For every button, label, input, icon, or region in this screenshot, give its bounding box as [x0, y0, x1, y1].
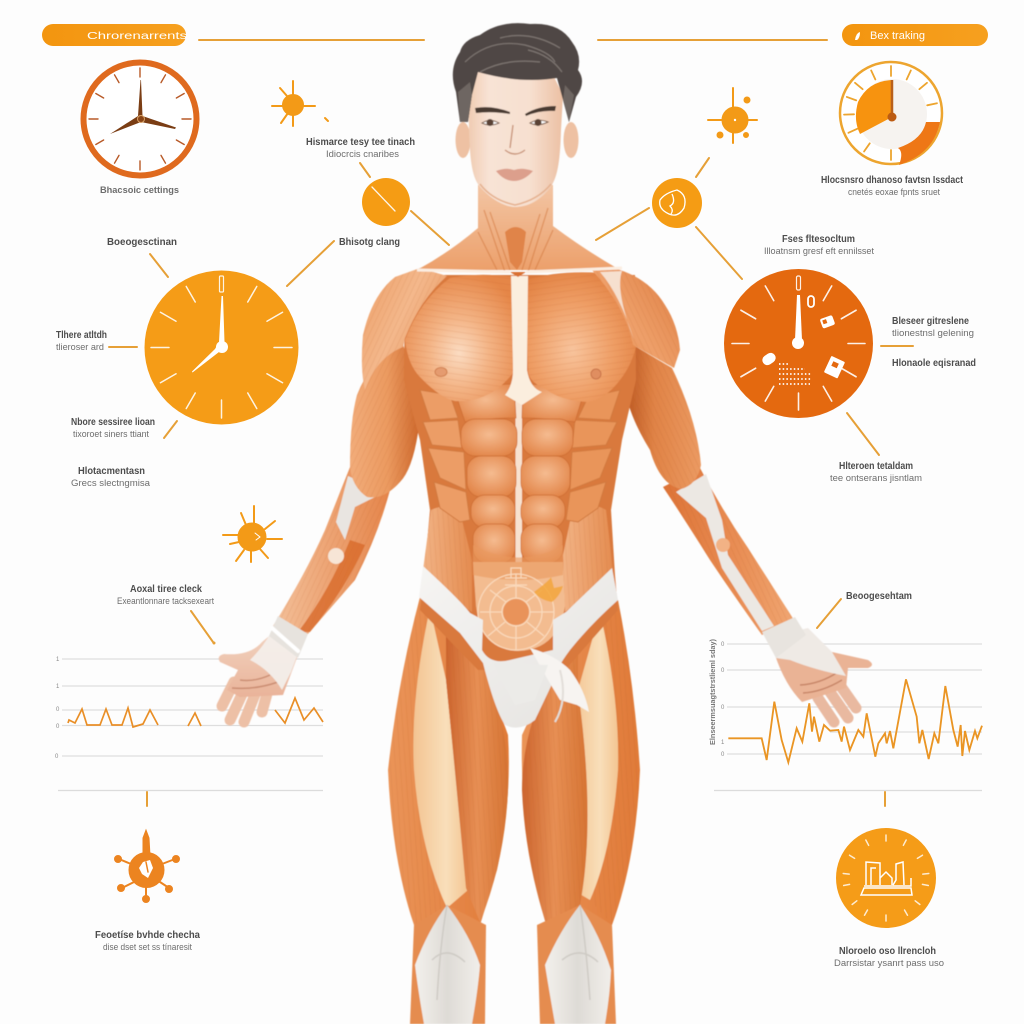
- arrow: dial to right labels: [881, 345, 913, 347]
- header: left pill: Chrorenarrents: [87, 30, 187, 42]
- label: beoogesehtam: Beoogesehtam: [846, 591, 912, 602]
- label: hlteroen tetaldam: Hlteroen tetaldam: [839, 461, 913, 472]
- head: [453, 23, 582, 207]
- chart: left line chart: 0: [55, 754, 59, 760]
- arrow: there atltdh to clock: [109, 346, 137, 348]
- eyes: [482, 119, 548, 126]
- icon: outlined wall clock: [84, 62, 196, 176]
- label: nbore sessiree: Nbore sessiree lioan: [71, 417, 155, 428]
- icon: orange badge left: [362, 178, 410, 226]
- label: there atltdh: Tlhere atltdh: [56, 330, 107, 341]
- linea alba: [516, 395, 522, 585]
- chart: right line chart: 0: [721, 668, 725, 674]
- chart: left line chart: 1: [56, 684, 60, 690]
- label: bleseer gitreslene: tlionestnsl gelening: [892, 328, 974, 339]
- chart: left line chart: [55, 657, 323, 760]
- icon: dark orange dial: [724, 269, 873, 418]
- icon: small sun left: [272, 81, 328, 126]
- rib serratus left: [420, 390, 470, 522]
- label: hlotacmentasn: Hlotacmentasn: [78, 466, 145, 477]
- caption: nloroelo: [834, 946, 944, 969]
- label: bleseer gitreslene: [892, 316, 974, 339]
- chart: right line chart: 0: [721, 642, 725, 648]
- divider: right lower: [714, 790, 982, 792]
- face: [468, 70, 563, 207]
- hair: [453, 23, 582, 122]
- label: hlotacmentasn: Grecs slectngmisa: [71, 478, 151, 489]
- label: hlteroen tetaldam: [830, 461, 922, 484]
- label: there atltdh: [56, 330, 107, 353]
- label: aoxal tiree cleck: [117, 584, 214, 607]
- label: boeogesctinan: Boeogesctinan: [107, 237, 177, 248]
- label: nbore sessiree: tixoroet siners ttiant: [73, 429, 149, 440]
- arrow: divider to icon right: [884, 792, 886, 806]
- arrow: aoxal to hand: [191, 611, 216, 644]
- label: upper centre left: Hismarce tesy tee tinach: [306, 137, 415, 148]
- torso base: [404, 275, 636, 670]
- caption: gauge: cnetés eoxae fpnts sruet: [848, 187, 940, 198]
- icon: small sun right: [708, 88, 757, 143]
- left deltoid: [362, 268, 447, 390]
- arrow: label to large clock: [287, 241, 334, 286]
- label: hlteroen tetaldam: tee ontserans jisntlam: [830, 473, 922, 484]
- right arm: [623, 345, 794, 635]
- right leg: [522, 600, 640, 1024]
- icon: large solid orange clock: [144, 270, 298, 424]
- chart: right line chart: Elnseermsuagtstrstlieml sday): [710, 639, 717, 745]
- nose: [505, 125, 525, 154]
- caption: gauge: Hlocsnsro dhanoso favtsn Issdact: [821, 175, 964, 186]
- caption: feoetise bvhde: Feoetíse bvhde checha: [95, 930, 200, 941]
- sternum: [505, 276, 542, 405]
- rib serratus right: [566, 390, 620, 522]
- arrow: dial to lower label: [847, 413, 879, 455]
- chart: right line chart: [710, 639, 982, 762]
- label: hlonaole eqisranad: Hlonaole eqisranad: [892, 358, 976, 369]
- divider: left lower: [58, 790, 323, 792]
- label: upper centre left: Idiocrcis cnaribes: [326, 149, 399, 160]
- side obliques: [423, 505, 613, 612]
- caption: feoetise bvhde: [95, 930, 200, 953]
- chart: right line chart: 0: [721, 752, 725, 758]
- caption: gauge: [821, 175, 964, 198]
- icon: pie gauge: [840, 62, 942, 165]
- caption: nloroelo: Darrsistar ysanrt pass uso: [834, 958, 944, 969]
- label: fses fltesocltum: [764, 234, 874, 257]
- arrow: divider to icon left: [146, 792, 148, 806]
- caption: clock settings: Bhacsoic cettings: [100, 185, 179, 196]
- icon: sun lower left: [223, 506, 282, 562]
- label: there atltdh: tlieroser ard: [56, 342, 104, 353]
- arrow: beoogesehtam to wrist: [817, 599, 841, 628]
- figure: anatomical male body: [219, 23, 872, 1024]
- arrow: nbore sessiree to clock: [164, 421, 177, 438]
- eyebrows: [475, 106, 556, 116]
- abdominal muscles: [455, 384, 584, 563]
- right deltoid: [590, 268, 680, 368]
- label: upper centre left: [306, 137, 415, 160]
- label: fses fltesocltum: Fses fltesocltum: [782, 234, 855, 245]
- caption: feoetise bvhde: dise dset set ss tínaresit: [103, 942, 192, 953]
- arrow: boeogesctinan to clock: [150, 254, 168, 277]
- chart: right line chart: 1: [721, 740, 725, 746]
- label: bhisotg clang: Bhisotg clang: [339, 237, 400, 248]
- label: bleseer gitreslene: Bleseer gitreslene: [892, 316, 969, 327]
- icon: orange badge right: [652, 178, 702, 228]
- neck and trapezius: [417, 185, 622, 277]
- arrow: badge to dial: [696, 227, 742, 279]
- chart: left line chart: 1: [56, 657, 60, 663]
- label: fses fltesocltum: Illoatnsm gresf eft ennilsset: [764, 246, 874, 257]
- arrow: badge to neck right: [596, 208, 649, 240]
- lips: [496, 169, 533, 181]
- header: right pill: Bex traking: [870, 30, 925, 42]
- abdominal organ overlay: [473, 545, 565, 651]
- ears: [456, 122, 578, 158]
- chart: left line chart: 0: [56, 707, 60, 713]
- right hand: [762, 617, 872, 722]
- header: left pill: [42, 24, 187, 46]
- left hand: [219, 616, 308, 722]
- hair highlights: [465, 36, 562, 72]
- left pectoral: [405, 275, 513, 401]
- caption: nloroelo: Nloroelo oso llrencloh: [839, 946, 936, 957]
- icon: orange badge with bars: [836, 828, 936, 928]
- header: right rule: [598, 39, 827, 41]
- hair sides fade: [458, 82, 574, 122]
- white undergarment: [419, 566, 618, 728]
- header: left rule: [199, 39, 424, 41]
- left arm: [273, 345, 418, 634]
- left leg: [388, 597, 509, 1024]
- arrow: sun to badge right: [696, 158, 709, 177]
- label: hlotacmentasn: [71, 466, 151, 489]
- chart: left line chart: 0: [56, 724, 60, 730]
- header: right pill: [842, 24, 988, 46]
- chart: right line chart: 0: [721, 705, 725, 711]
- arrow: badge to neck left: [411, 211, 449, 245]
- label: aoxal tiree cleck: Aoxal tiree cleck: [130, 584, 202, 595]
- icon: orange hub with spokes: [114, 830, 180, 902]
- arrow: label to badge left: [360, 163, 370, 177]
- label: nbore sessiree: [71, 417, 155, 440]
- label: aoxal tiree cleck: Exeantlonnare tacksexeart: [117, 596, 214, 607]
- jaw shadow: [480, 184, 551, 205]
- right pectoral: [526, 272, 637, 402]
